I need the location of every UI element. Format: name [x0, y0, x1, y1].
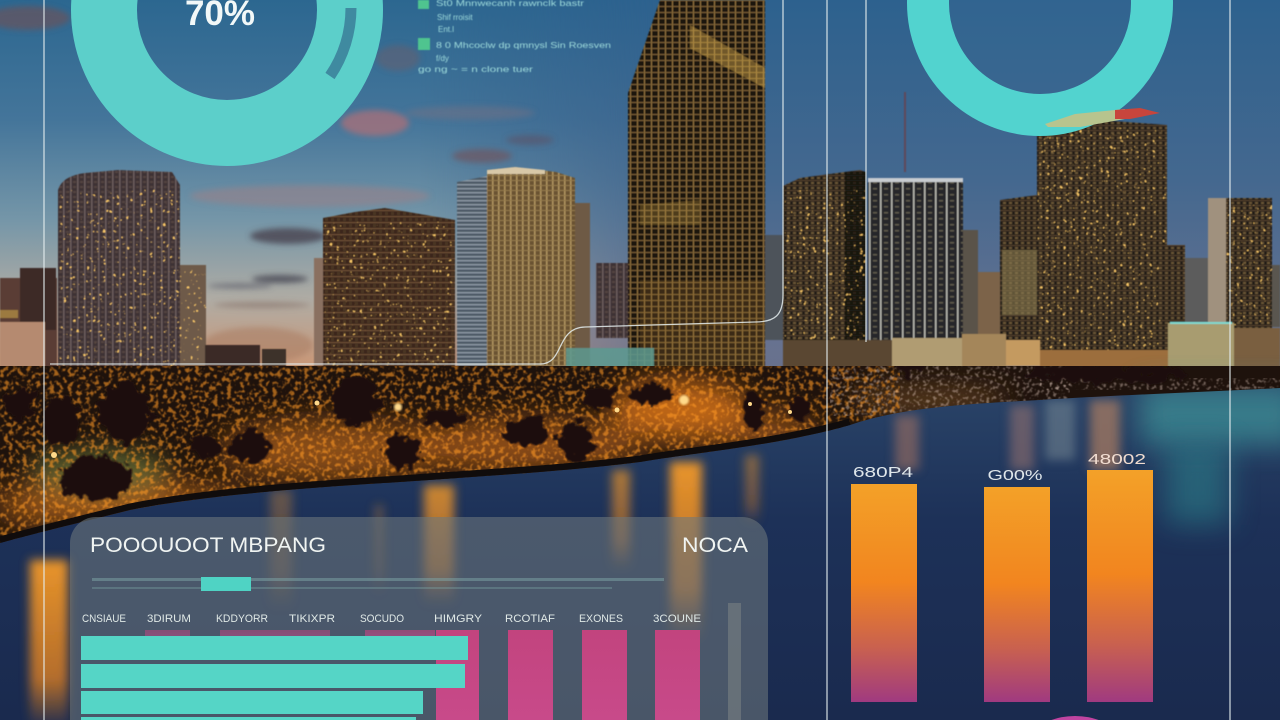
tree-light speckle — [0, 366, 900, 546]
water — [0, 385, 1280, 720]
building: dark tower centre — [783, 170, 866, 345]
building: far left — [0, 268, 57, 368]
building: olive tower — [1000, 195, 1037, 340]
legend: left donut: go ng ~ = n clone tuer — [418, 64, 533, 74]
column labels: EXONES — [579, 613, 623, 625]
clouds — [0, 6, 554, 363]
building: left tower — [58, 170, 180, 366]
column labels: HIMGRY — [434, 613, 483, 625]
legend: left donut: Ent.l — [438, 25, 454, 34]
building: narrow back tower — [596, 263, 628, 338]
bar chart: orange columns — [851, 451, 1153, 702]
column labels: 3COUNE — [653, 613, 701, 625]
street lamps — [51, 395, 792, 458]
slider track — [92, 577, 664, 591]
pink dial at bottom edge — [1039, 716, 1111, 720]
panel: product metrics — [70, 517, 768, 720]
legend: left donut — [418, 0, 611, 74]
shoreline with trees and lights — [0, 360, 1280, 546]
bar 3: 48002 — [1088, 451, 1146, 468]
column labels: RCOTIAF — [505, 613, 555, 625]
bar 2: G00% — [988, 467, 1042, 484]
building: large right tower — [1037, 120, 1185, 352]
panel corner label: NOCA — [682, 534, 748, 557]
building: low dark block — [205, 345, 286, 366]
column labels: 3DIRUM — [147, 613, 191, 625]
building: back slab — [765, 235, 783, 340]
building: antenna — [904, 92, 906, 172]
building: right annex — [1185, 258, 1209, 323]
pink columns — [145, 630, 700, 720]
column labels: SOCUDO — [360, 613, 404, 625]
side scroll rail — [728, 603, 741, 720]
legend: left donut: Shif rroisit — [437, 13, 473, 22]
legend: left donut: f/dy — [436, 54, 449, 63]
building: brown mid-rise — [314, 208, 455, 366]
panel heading: POOOUOOT MBPANG — [90, 534, 326, 557]
skyline buildings — [0, 0, 1280, 380]
bar 1: 680P4 — [853, 464, 913, 481]
column labels: KDDYORR — [216, 613, 268, 625]
legend: left donut: 8 0 Mhcoclw dp qmnysl Sin Roesven — [436, 40, 611, 50]
roof accent — [1045, 108, 1160, 127]
bar 1 — [851, 464, 917, 702]
teal horizontal bars — [81, 636, 468, 720]
water reflections — [30, 400, 1120, 720]
column labels — [82, 613, 701, 625]
building: small left annex — [180, 265, 206, 366]
bar 2 — [984, 467, 1050, 702]
donut remainder arc — [330, 8, 351, 76]
donut chart: right — [928, 0, 1152, 115]
column labels: CNSIAUE — [82, 613, 126, 625]
building: main glass tower — [628, 0, 765, 372]
column labels: TIKIXPR — [289, 613, 335, 625]
background: dusk sky — [0, 0, 1280, 400]
building: far right tower — [1208, 198, 1280, 328]
building: pale tower — [457, 167, 590, 368]
bar 3 — [1087, 451, 1153, 702]
building: waterfront low blocks — [566, 322, 1280, 380]
building: low right-of-centre — [963, 230, 1002, 342]
donut chart: left 70% — [104, 0, 351, 133]
building: striped tower — [868, 178, 963, 342]
palm and tree silhouettes — [6, 360, 1190, 500]
shore edge — [0, 423, 850, 541]
